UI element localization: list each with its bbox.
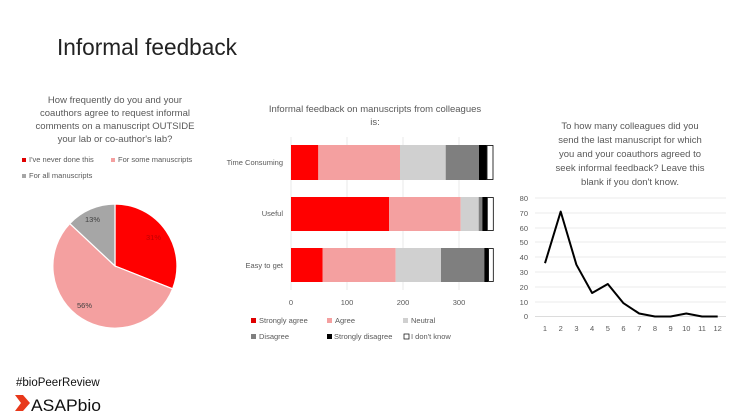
pie labels [77,215,161,310]
y axis labels: 40 [520,253,528,262]
bar chart title: is: [370,117,380,128]
panel: pie chart [22,95,194,328]
y axis labels: 30 [520,268,528,277]
pie title [36,95,194,145]
category labels: Time Consuming [227,158,283,167]
bar legend: Strongly agree [259,316,308,325]
x axis labels: 5 [606,324,610,333]
x axis labels: 12 [714,324,722,333]
bar chart title [269,104,481,128]
line chart title: send the last manuscript for which [558,135,702,146]
line [545,212,718,316]
y axis labels: 10 [520,298,528,307]
bar legend: Disagree [259,332,289,341]
x axis labels: 7 [637,324,641,333]
bar chart title: Informal feedback on manuscripts from colleagues [269,104,481,115]
x axis labels: 6 [621,324,626,333]
pie [53,204,177,328]
bar legend [251,316,451,341]
pie legend: For all manuscripts [29,171,93,180]
x axis labels: 10 [682,324,690,333]
line chart title: blank if you don't know. [581,177,679,188]
x axis labels: 1 [543,324,547,333]
x axis labels: 9 [669,324,673,333]
x axis labels: 0 [289,298,293,307]
y axis labels: 80 [520,194,528,203]
bar legend: Agree [335,316,355,325]
title: Informal feedback [57,34,237,60]
y axis labels: 60 [520,224,528,233]
hashtag: #bioPeerReview [16,377,100,389]
x axis labels: 3 [574,324,578,333]
x axis labels: 4 [590,324,594,333]
icon: red chevron [15,395,30,411]
panel: stacked bar chart [227,104,493,341]
x axis labels: 8 [653,324,657,333]
bar legend: I don't know [411,332,451,341]
pie title: How frequently do you and your [48,95,182,106]
panel: line chart [520,121,726,333]
x axis labels [543,324,722,333]
pie legend: For some manuscripts [118,155,192,164]
pie labels: 56% [77,301,92,310]
pie title: coauthors agree to request informal [40,108,190,119]
pie legend: I've never done this [29,155,94,164]
x axis labels: 11 [698,324,706,333]
y axis labels: 0 [524,312,528,321]
pie legend [22,155,192,180]
line chart title: seek informal feedback? Leave this [556,163,705,174]
y axis labels: 20 [520,283,528,292]
x axis labels: 200 [397,298,409,307]
pie title: comments on a manuscript OUTSIDE [36,121,194,132]
bar legend: Strongly disagree [334,332,392,341]
x axis labels: 100 [341,298,353,307]
line chart title: To how many colleagues did you [561,121,699,132]
line chart title [556,121,705,188]
pie labels: 31% [146,233,161,242]
bar legend: Neutral [411,316,436,325]
bars [291,145,493,282]
y axis labels: 70 [520,209,528,218]
y axis labels: 50 [520,238,528,247]
category labels: Useful [262,209,283,218]
x axis labels: 300 [453,298,465,307]
y axis labels [520,194,528,321]
x axis labels: 2 [559,324,563,333]
pie labels: 13% [85,215,100,224]
logo: ASAPbio: ASAPbio [31,396,101,415]
category labels: Easy to get [245,261,284,270]
x axis labels [289,298,465,307]
pie title: your lab or co-author's lab? [58,134,172,145]
line chart title: you and your coauthors agreed to [559,149,701,160]
category labels [227,158,284,270]
